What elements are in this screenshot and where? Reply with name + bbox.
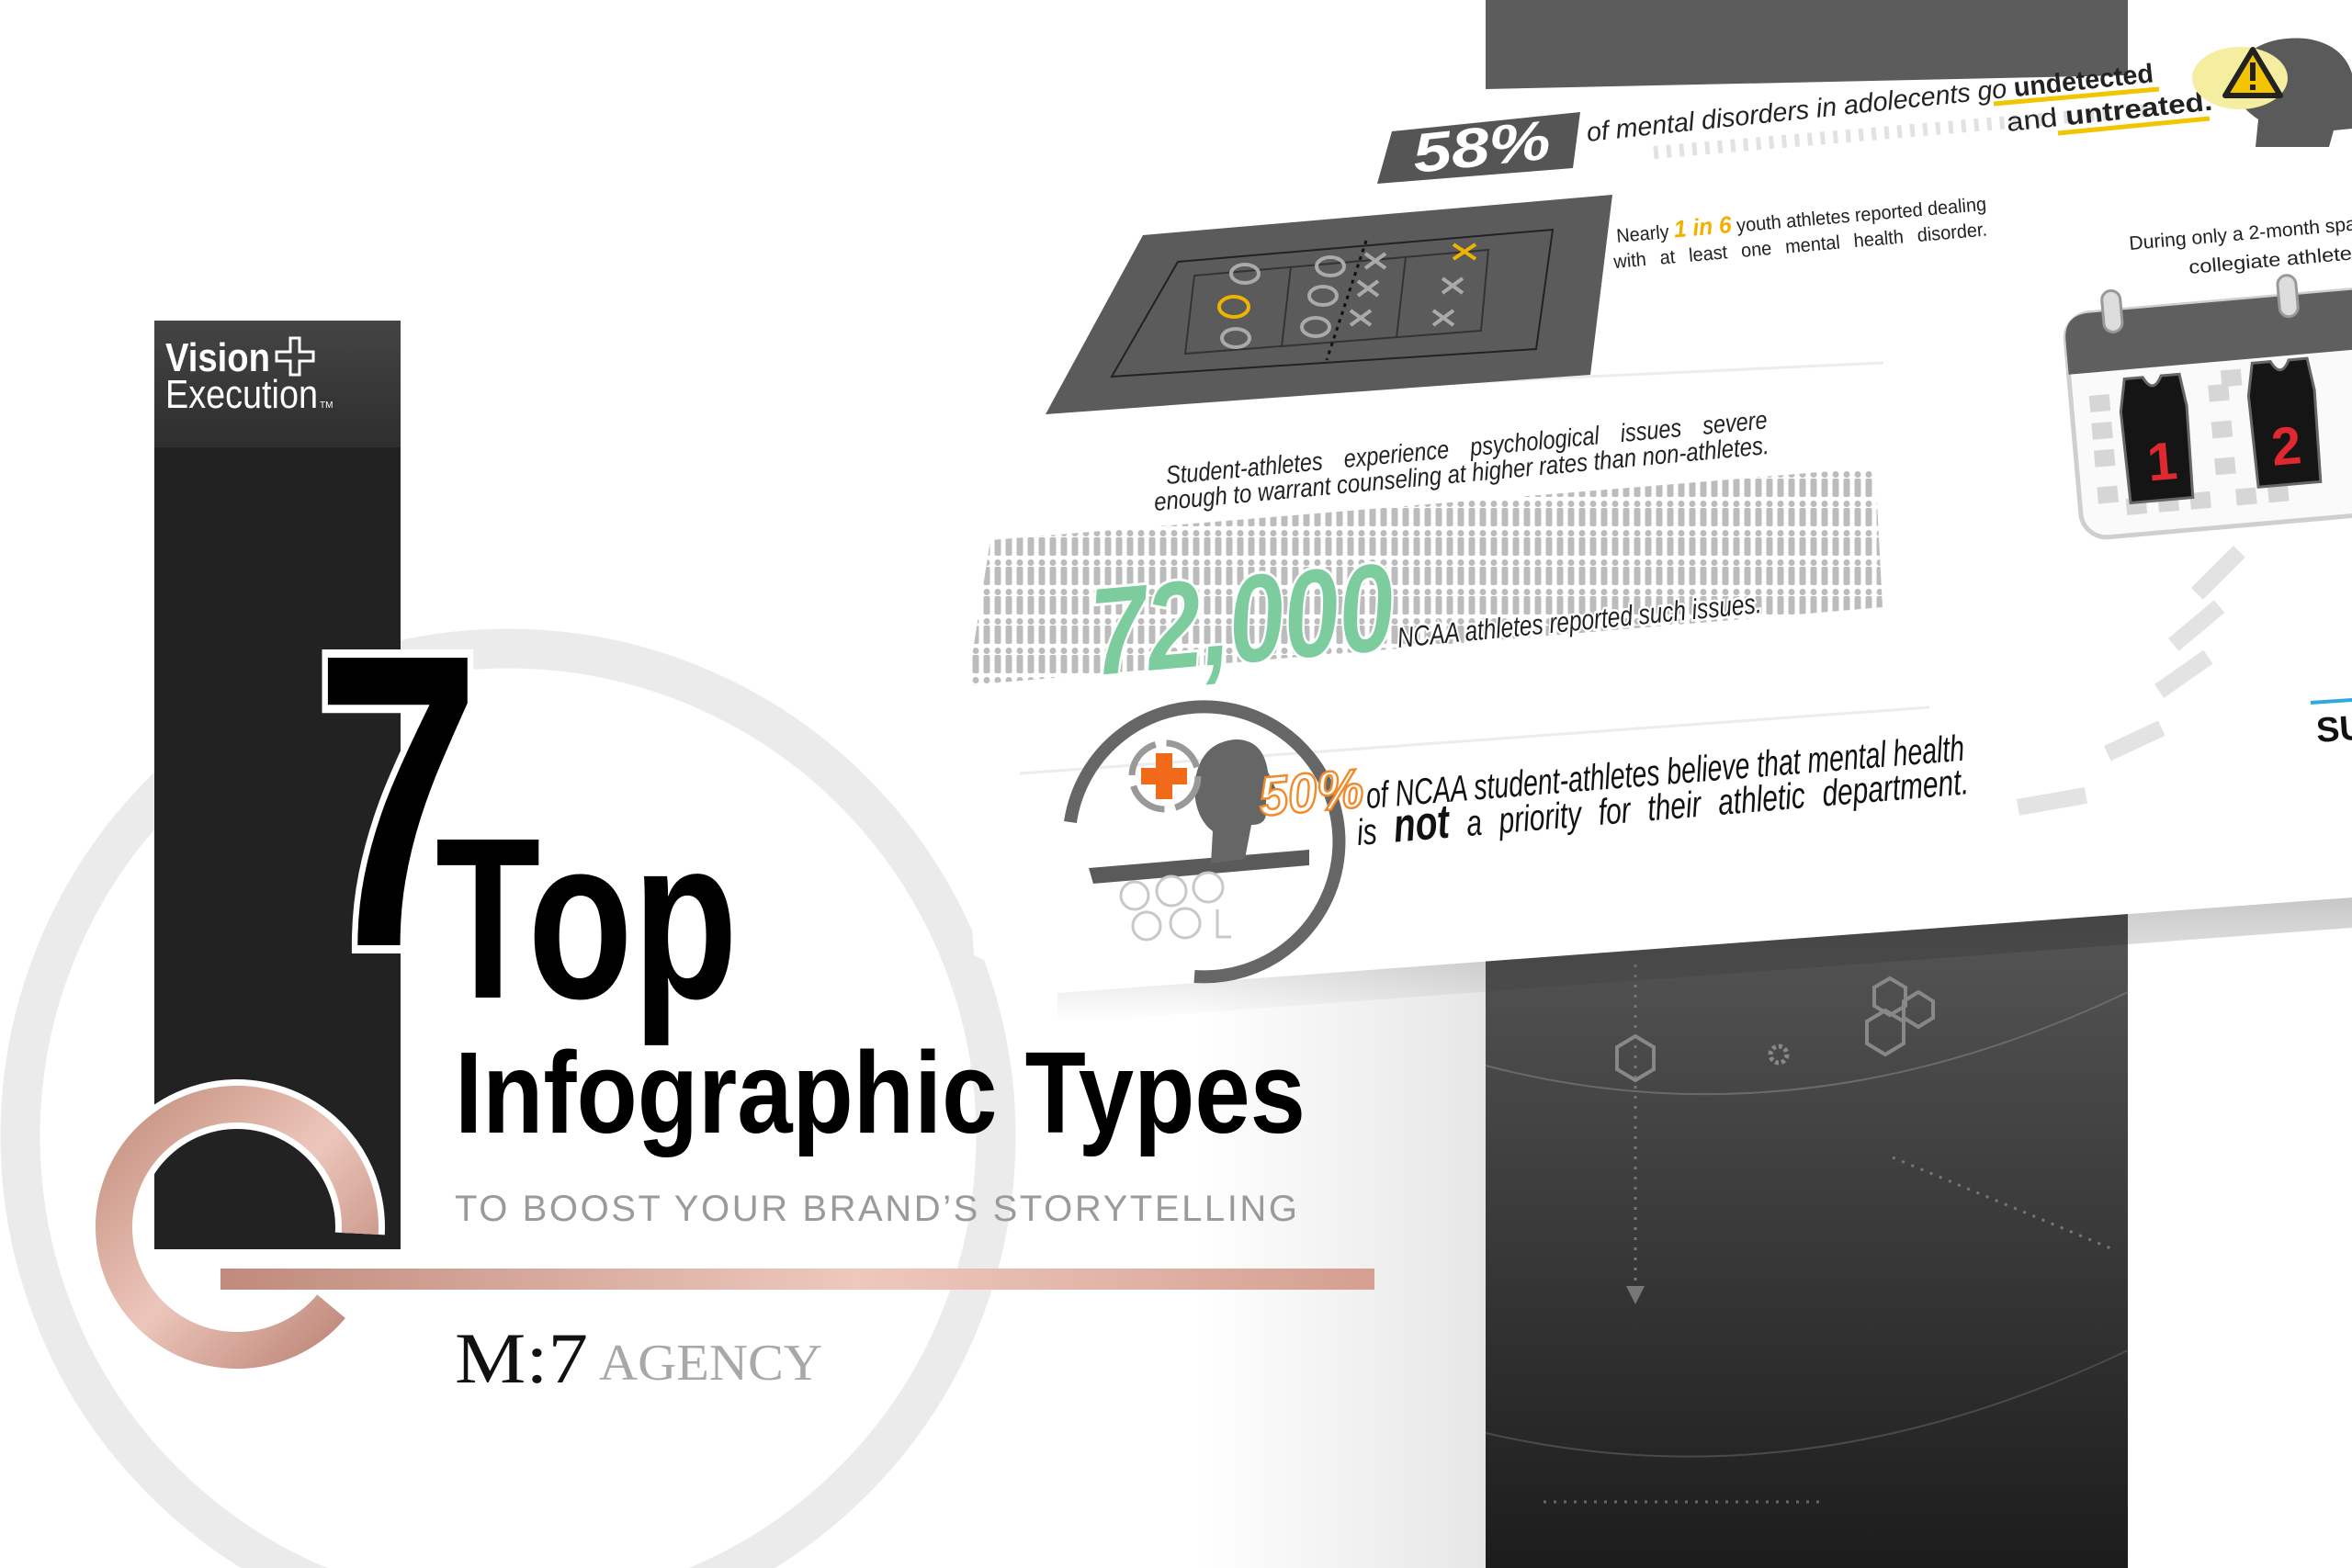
radiating bars [2017, 546, 2245, 816]
stat: 58%: of mental disorders in adolecents go undetected [1585, 59, 2154, 148]
stat: 58%: and untreated. [2005, 87, 2213, 138]
big gray ring [20, 649, 996, 1568]
subtitle: TO BOOST YOUR BRAND’S STORYTELLING [455, 1189, 1297, 1229]
rose gold ring and bar [114, 1104, 1374, 1350]
title: 7: 7 [315, 568, 481, 1034]
brand bar: Vision + Execution: Execution [165, 372, 318, 417]
logo: M:7 Agency [455, 1318, 822, 1398]
icon: calendar with jerseys: 1 [2145, 431, 2179, 493]
stat: 58% [1377, 59, 2213, 185]
text: during 2-month span: collegiate athletes [2188, 243, 2352, 278]
dark panel top [1486, 0, 2128, 119]
text: 1 in 6 [1611, 188, 1988, 273]
text: student-athletes: Student-athletes experience psychological issues severe [1165, 405, 1769, 490]
stat: 58%: 58% [1409, 109, 1554, 185]
chart: people grid [967, 468, 1883, 685]
dark panel bottom [1486, 873, 2128, 1568]
logo: M:7 Agency: AGENCY [599, 1335, 822, 1392]
stat: 72,000: 72,000 [1085, 537, 1399, 702]
text: during 2-month span [2128, 212, 2352, 278]
text: 1 in 6: Nearly 1 in 6 youth athletes reported dealing [1615, 188, 1987, 248]
icon: head with warning [2192, 39, 2352, 147]
stat: 50% not a priority [1256, 728, 1971, 856]
background fade near panel [1194, 919, 1486, 1568]
stat: 50% not a priority: is not a priority for their athletic department. [1354, 751, 1971, 856]
logo: M:7 Agency: M:7 [455, 1318, 588, 1398]
infographic card [919, 39, 2352, 1023]
icon: calendar with jerseys: 2 [2269, 415, 2303, 478]
icon: calendar with jerseys [2062, 268, 2352, 539]
stat: 50% not a priority: of NCAA student-athletes believe that mental health [1364, 728, 1966, 817]
stat: 72,000 [1085, 537, 1763, 702]
title: Top: Top [435, 790, 738, 1046]
volleyball court [1046, 195, 1612, 414]
icon: head with medical cross [1070, 706, 1339, 976]
title: Infographic Types: Infographic Types [455, 1028, 1306, 1157]
text: student-athletes: enough to warrant counseling at higher rates than non-athletes. [1153, 431, 1770, 516]
brand bar: Vision + Execution: TM [320, 400, 333, 411]
brand bar: Vision + Execution [154, 321, 401, 1249]
stat: 50% not a priority: 50% [1256, 757, 1366, 828]
stat: 72,000: NCAA athletes reported such issues. [1396, 587, 1763, 654]
brand bar: Vision + Execution: Vision [165, 335, 270, 380]
text: 1 in 6: with at least one mental health disorder. [1611, 220, 1988, 273]
